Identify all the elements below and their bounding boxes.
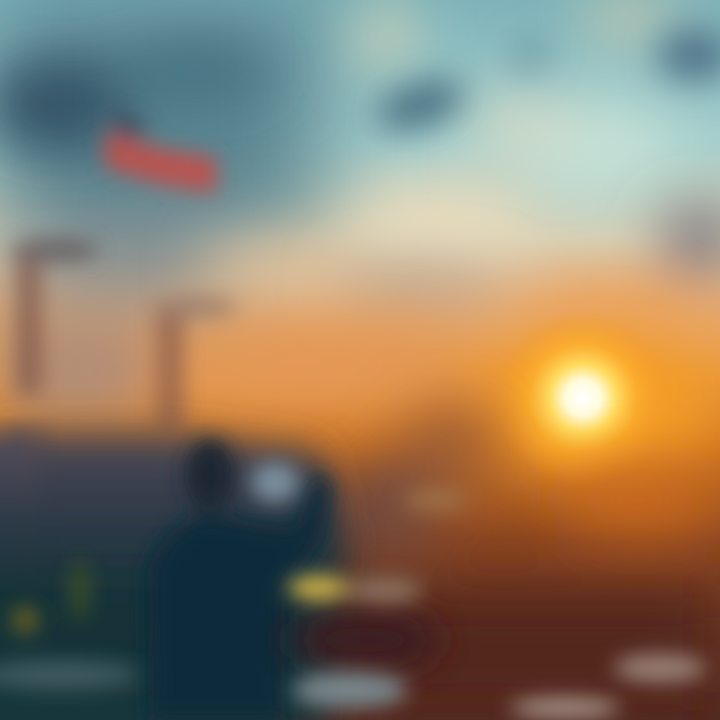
bright clouds [200,0,680,294]
cloud band right [335,208,720,330]
small dark clouds upper right [370,29,720,138]
dark clouds upper left [0,46,275,150]
distant towers [11,237,237,430]
broad blue-grey sky on the left [0,0,320,325]
rust ground right [330,405,720,720]
dark red band under highlights [290,610,440,670]
sun [495,310,671,486]
person silhouette [148,439,332,720]
foreground highlights [0,491,706,718]
flag [104,104,218,194]
dark ground at the bottom frame edge [0,695,340,720]
warm horizon glow [0,325,715,475]
raised paper [251,462,299,502]
dark ground at the left frame edge [0,418,48,695]
dark ground left [0,432,350,720]
